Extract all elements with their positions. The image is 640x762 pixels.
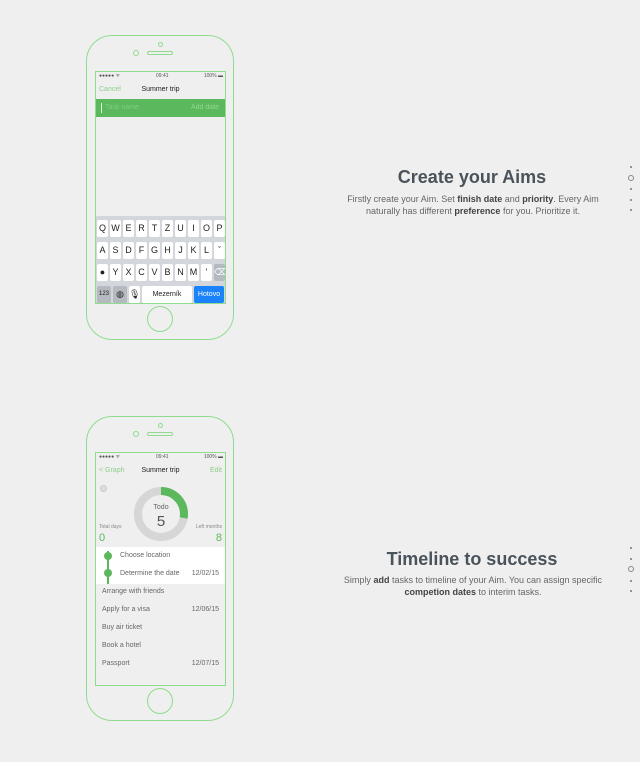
timeline list: 12/02/15 [192, 570, 219, 577]
phone 2 screen: Arrange with friends [102, 588, 164, 595]
phone 1 screen: 100% ▬ [204, 73, 223, 79]
timeline list [96, 547, 225, 584]
keyboard: ● [100, 267, 105, 277]
donut chart: Todo [153, 504, 169, 511]
phone 2 screen: 12/06/15 [192, 606, 219, 613]
keyboard: C [138, 267, 145, 277]
keyboard: Hotovo [198, 291, 220, 298]
keyboard: J [178, 245, 183, 255]
keyboard: I [192, 223, 195, 233]
keyboard: Mezerník [153, 291, 181, 298]
phone 2 screen: Edit [210, 467, 222, 474]
keyboard: 123 [99, 291, 109, 297]
donut chart: 5 [157, 513, 165, 530]
phone 2 screen: 12/07/15 [192, 660, 219, 667]
text 2: Simply add tasks to timeline of your Aim. You can assign specific competion dates to interim tasks. [344, 575, 602, 597]
phone 2 screen: ●●●●● ᯤ [99, 454, 120, 460]
keyboard: Y [112, 267, 118, 277]
keyboard: V [151, 267, 158, 277]
keyboard: Z [165, 223, 170, 233]
phone 2 screen: < Graph [99, 467, 124, 474]
donut chart [134, 487, 188, 541]
keyboard: K [190, 245, 196, 255]
keyboard: S [112, 245, 118, 255]
phone 1 home button [147, 306, 173, 332]
phone 1 screen: ●●●●● ᯤ [99, 73, 120, 79]
text 1: Firstly create your Aim. Set finish date and priority. Every Aim naturally has different preference for you. Prioritize it. [347, 194, 599, 216]
keyboard: T [152, 223, 157, 233]
keyboard: X [125, 267, 132, 277]
keyboard: ˇ [218, 245, 221, 255]
phone 2 camera and speaker [133, 423, 173, 437]
green input bar [96, 99, 225, 117]
keyboard: D [125, 245, 132, 255]
keyboard: P [216, 223, 222, 233]
keyboard: ' [206, 267, 207, 277]
phone 2 screen: Passport [102, 660, 130, 667]
phone 2 screen: 0 [99, 532, 105, 544]
keyboard: ◍ [116, 289, 124, 299]
keyboard: H [164, 245, 171, 255]
phone 2 screen: 100% ▬ [204, 454, 223, 460]
keyboard: G [151, 245, 158, 255]
pager dots 2 [628, 547, 634, 592]
keyboard: R [138, 223, 145, 233]
keyboard: N [177, 267, 184, 277]
phone 2 screen: Book a hotel [102, 642, 141, 649]
keyboard: O [203, 223, 210, 233]
phone 2 screen: 8 [216, 532, 222, 544]
keyboard: F [139, 245, 144, 255]
timeline list: Choose location [120, 552, 170, 559]
green input bar: Add date [191, 104, 219, 111]
keyboard: Q [99, 223, 106, 233]
keyboard: W [111, 223, 120, 233]
phone 1 screen [95, 71, 226, 304]
phone 2 screen: Left months [196, 524, 222, 530]
keyboard: U [177, 223, 184, 233]
phone 1 outline [86, 35, 234, 340]
heading 1: Create your Aims [398, 167, 546, 187]
phone 1 screen: 09:41 [156, 73, 169, 79]
phone 2 screen: Buy air ticket [102, 624, 142, 631]
pager dots 1 [628, 166, 634, 211]
heading 2: Timeline to success [387, 549, 557, 569]
phone 2 screen [95, 452, 226, 686]
keyboard: 🎙 [129, 289, 140, 299]
phone 2 outline [86, 416, 234, 721]
phone 1 camera and speaker [133, 42, 173, 56]
green input bar: Task name [105, 104, 139, 111]
keyboard: A [99, 245, 106, 255]
keyboard: M [190, 267, 197, 277]
phone 1 screen: Summer trip [141, 86, 180, 93]
phone 2 screen: 09:41 [156, 454, 169, 460]
keyboard: L [204, 245, 209, 255]
timeline list: Determine the date [120, 570, 180, 577]
keyboard: E [125, 223, 132, 233]
phone 2 home button [147, 688, 173, 714]
keyboard [96, 216, 225, 305]
phone 2 screen: Summer trip [141, 467, 180, 474]
keyboard: B [164, 267, 170, 277]
phone 1 screen: Cancel [99, 86, 121, 93]
phone 2 screen: Total days [99, 524, 122, 530]
phone 2 screen: Apply for a visa [102, 606, 150, 613]
